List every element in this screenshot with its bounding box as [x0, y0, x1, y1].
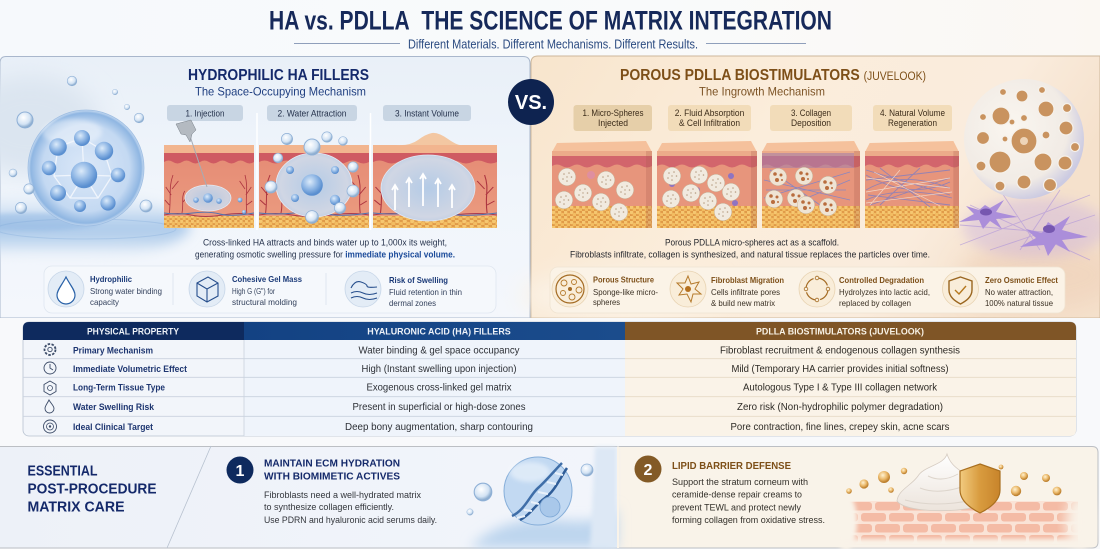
care tip 2: lipid barrier defense: 2: [644, 462, 653, 479]
feature: hydrophilic: [48, 271, 162, 307]
heading: essential post-procedure matrix care: POST-PROCEDURE: [28, 482, 157, 498]
feature: cohesive gel mass: structural molding: [232, 297, 297, 307]
panel: post-procedure care: [0, 446, 1100, 549]
step label: fluid absorption: [668, 105, 751, 131]
feature: risk of swelling: dermal zones: [389, 298, 436, 308]
description: HA mechanism: [195, 237, 455, 260]
description: PDLLA mechanism: [570, 237, 930, 259]
row: ideal clinical target: Ideal Clinical Target: [73, 421, 153, 432]
care tip 1: maintain ECM hydration: [226, 456, 437, 525]
subtitle: Different Materials. Different Mechanisms. Different Results.: [408, 38, 698, 52]
feature: zero osmotic effect: [942, 271, 1058, 308]
title: HA vs. PDLLA THE SCIENCE OF MATRIX INTEGRATION: [269, 6, 832, 36]
feature: cohesive gel mass: Cohesive Gel Mass: [232, 274, 302, 284]
row: ideal clinical target: [44, 420, 950, 433]
care tip 1: maintain ECM hydration: WITH BIOMIMETIC ACTIVES: [264, 472, 400, 482]
row: water swelling risk: Present in superficial or high-dose zones: [352, 402, 526, 413]
description: HA mechanism: Cross-linked HA attracts and binds water up to 1,000x its weight,: [203, 237, 447, 248]
row: immediate volumetric effect: [44, 362, 948, 375]
row: primary mechanism: [44, 344, 960, 356]
care tip 1: maintain ECM hydration: MAINTAIN ECM HYDRATION: [264, 458, 400, 470]
row: immediate volumetric effect: Immediate Volumetric Effect: [73, 363, 187, 374]
panel: hydrophilic HA fillers: [0, 56, 530, 318]
step label: injection: 1. Injection: [186, 108, 224, 118]
heading: porous PDLLA biostimulators: POROUS PDLLA BIOSTIMULATORS (JUVELOOK): [620, 67, 926, 84]
skin illustration: natural volume regeneration: [865, 141, 959, 228]
step label: instant volume: 3. Instant Volume: [395, 108, 459, 118]
row: primary mechanism: Primary Mechanism: [73, 344, 153, 355]
VS badge: VS.: [515, 92, 547, 114]
step label: instant volume: [383, 105, 471, 121]
comparison table: [23, 322, 1076, 436]
feature: cohesive gel mass: High G (G") for: [232, 286, 275, 296]
row: long-term tissue type: Autologous Type I & Type III collagen network: [743, 382, 937, 394]
care tip 2: lipid barrier defense: Support the stratum corneum with: [672, 477, 808, 487]
icon: DNA bubble and water: [467, 446, 619, 548]
water background: [0, 75, 190, 260]
step label: collagen deposition: 3. Collagen: [791, 108, 831, 118]
subheading: ingrowth mechanism: The Ingrowth Mechanism: [699, 84, 825, 98]
skin illustration: water attraction: [259, 132, 369, 228]
heading: essential post-procedure matrix care: ESSENTIAL: [28, 464, 98, 480]
feature: fibroblast migration: Cells infiltrate pores: [711, 287, 780, 297]
row: water swelling risk: Water Swelling Risk: [73, 401, 155, 412]
heading: essential post-procedure matrix care: MATRIX CARE: [28, 500, 125, 516]
description: HA mechanism: generating osmotic swelling pressure for immediate physical volume.: [195, 249, 455, 260]
feature: fibroblast migration: [670, 271, 784, 308]
feature: controlled degradation: [799, 271, 930, 308]
skin illustration: injection: [164, 120, 254, 228]
feature strip: HA properties: [44, 266, 496, 313]
subheading: space-occupying mechanism: The Space-Occupying Mechanism: [195, 84, 366, 98]
table header: hyaluronic acid fillers: [244, 322, 625, 340]
step label: fluid absorption: 2. Fluid Absorption: [675, 108, 744, 118]
step label: micro-spheres injected: [574, 105, 652, 131]
feature: fibroblast migration: & build new matrix: [711, 298, 776, 308]
table header: PDLLA biostimulators: PDLLA BIOSTIMULATORS (JUVELOOK): [756, 326, 924, 336]
row: primary mechanism: Water binding & gel space occupancy: [358, 345, 520, 356]
skin illustration: cell infiltration: [657, 141, 757, 228]
step label: injection: [167, 105, 243, 121]
feature: risk of swelling: Risk of Swelling: [389, 275, 448, 285]
row: water swelling risk: [45, 400, 943, 413]
care tip 1: maintain ECM hydration: Use PDRN and hyaluronic acid serums daily.: [264, 515, 437, 525]
icon: HA water sphere: [9, 76, 152, 226]
care tip 2: lipid barrier defense: prevent TEWL and protect newly: [672, 502, 802, 512]
care tip 2: lipid barrier defense: [634, 456, 825, 525]
step label: natural volume regeneration: 4. Natural Volume: [880, 108, 945, 118]
description: PDLLA mechanism: Porous PDLLA micro-spheres act as a scaffold.: [665, 237, 839, 247]
icon: fibroblast cells: [959, 190, 1100, 260]
step label: micro-spheres injected: 1. Micro-Spheres: [582, 108, 644, 118]
description: PDLLA mechanism: Fibroblasts infiltrate, collagen is synthesized, and natural tissue replaces the particles over time.: [570, 249, 930, 259]
care tip 1: maintain ECM hydration: Fibroblasts need a well-hydrated matrix: [264, 490, 422, 500]
care tip 2: lipid barrier defense: ceramide-dense repair creams to: [672, 490, 802, 500]
heading: hydrophilic HA fillers: HYDROPHILIC HA FILLERS: [188, 67, 369, 84]
skin illustration: micro-spheres: [552, 141, 652, 228]
feature: cohesive gel mass: [189, 271, 302, 307]
table header: physical property: [23, 322, 244, 340]
table header: PDLLA biostimulators: [625, 322, 1076, 340]
row: ideal clinical target: Pore contraction, fine lines, crepey skin, acne scars: [730, 422, 950, 433]
icon: skin barrier, cream and shield: [835, 454, 1094, 549]
feature: hydrophilic: Strong water binding: [90, 286, 162, 296]
feature: risk of swelling: [345, 271, 462, 308]
care tip 1: maintain ECM hydration: 1: [236, 463, 245, 480]
row: long-term tissue type: Exogenous cross-linked gel matrix: [366, 382, 512, 394]
heading: essential post-procedure matrix care: [28, 464, 157, 516]
step label: collagen deposition: Deposition: [791, 118, 831, 128]
care tip 1: maintain ECM hydration: to synthesize collagen efficiently.: [264, 502, 394, 512]
feature: zero osmotic effect: 100% natural tissue: [985, 298, 1053, 308]
table header: physical property: PHYSICAL PROPERTY: [87, 326, 180, 336]
step label: water attraction: 2. Water Attraction: [278, 108, 346, 118]
row: immediate volumetric effect: Mild (Temporary HA carrier provides initial softness): [732, 364, 948, 375]
feature: risk of swelling: Fluid retention in thin: [389, 287, 462, 297]
care tip 2: lipid barrier defense: LIPID BARRIER DEFENSE: [672, 461, 791, 472]
feature: zero osmotic effect: No water attraction,: [985, 287, 1053, 297]
skin illustration: instant volume: [373, 133, 497, 228]
step label: water attraction: [267, 105, 357, 121]
feature: hydrophilic: capacity: [90, 297, 120, 307]
step label: fluid absorption: & Cell Infiltration: [679, 118, 740, 128]
feature strip: PDLLA properties: [550, 267, 1065, 313]
feature: porous structure: Porous Structure: [593, 274, 654, 284]
feature: porous structure: Sponge-like micro-: [593, 287, 658, 297]
step label: collagen deposition: [770, 105, 852, 131]
step label: natural volume regeneration: [873, 105, 952, 131]
care tip 2: lipid barrier defense: forming collagen from oxidative stress.: [672, 515, 825, 525]
table header: hyaluronic acid fillers: HYALURONIC ACID (HA) FILLERS: [367, 326, 511, 336]
step label: micro-spheres injected: Injected: [598, 118, 628, 128]
step label: natural volume regeneration: Regeneration: [888, 118, 937, 128]
row: immediate volumetric effect: High (Instant swelling upon injection): [362, 364, 516, 375]
VS badge: [508, 79, 554, 125]
row: long-term tissue type: [44, 381, 937, 395]
panel: porous PDLLA biostimulators: [520, 56, 1100, 318]
feature: zero osmotic effect: Zero Osmotic Effect: [985, 275, 1058, 285]
feature: controlled degradation: Hydrolyzes into lactic acid,: [839, 287, 930, 297]
feature: hydrophilic: Hydrophilic: [90, 274, 132, 284]
icon: porous PDLLA sphere: [964, 79, 1084, 199]
row: ideal clinical target: Deep bony augmentation, sharp contouring: [345, 422, 533, 433]
row: long-term tissue type: Long-Term Tissue Type: [73, 382, 165, 392]
feature: controlled degradation: replaced by collagen: [839, 298, 911, 308]
feature: porous structure: [552, 271, 658, 307]
feature: porous structure: spheres: [593, 297, 620, 307]
skin illustration: collagen deposition: [762, 141, 860, 228]
row: primary mechanism: Fibroblast recruitment & endogenous collagen synthesis: [720, 345, 960, 356]
feature: fibroblast migration: Fibroblast Migration: [711, 275, 784, 285]
row: water swelling risk: Zero risk (Non-hydrophilic polymer degradation): [737, 402, 943, 413]
feature: controlled degradation: Controlled Degradation: [839, 275, 924, 285]
